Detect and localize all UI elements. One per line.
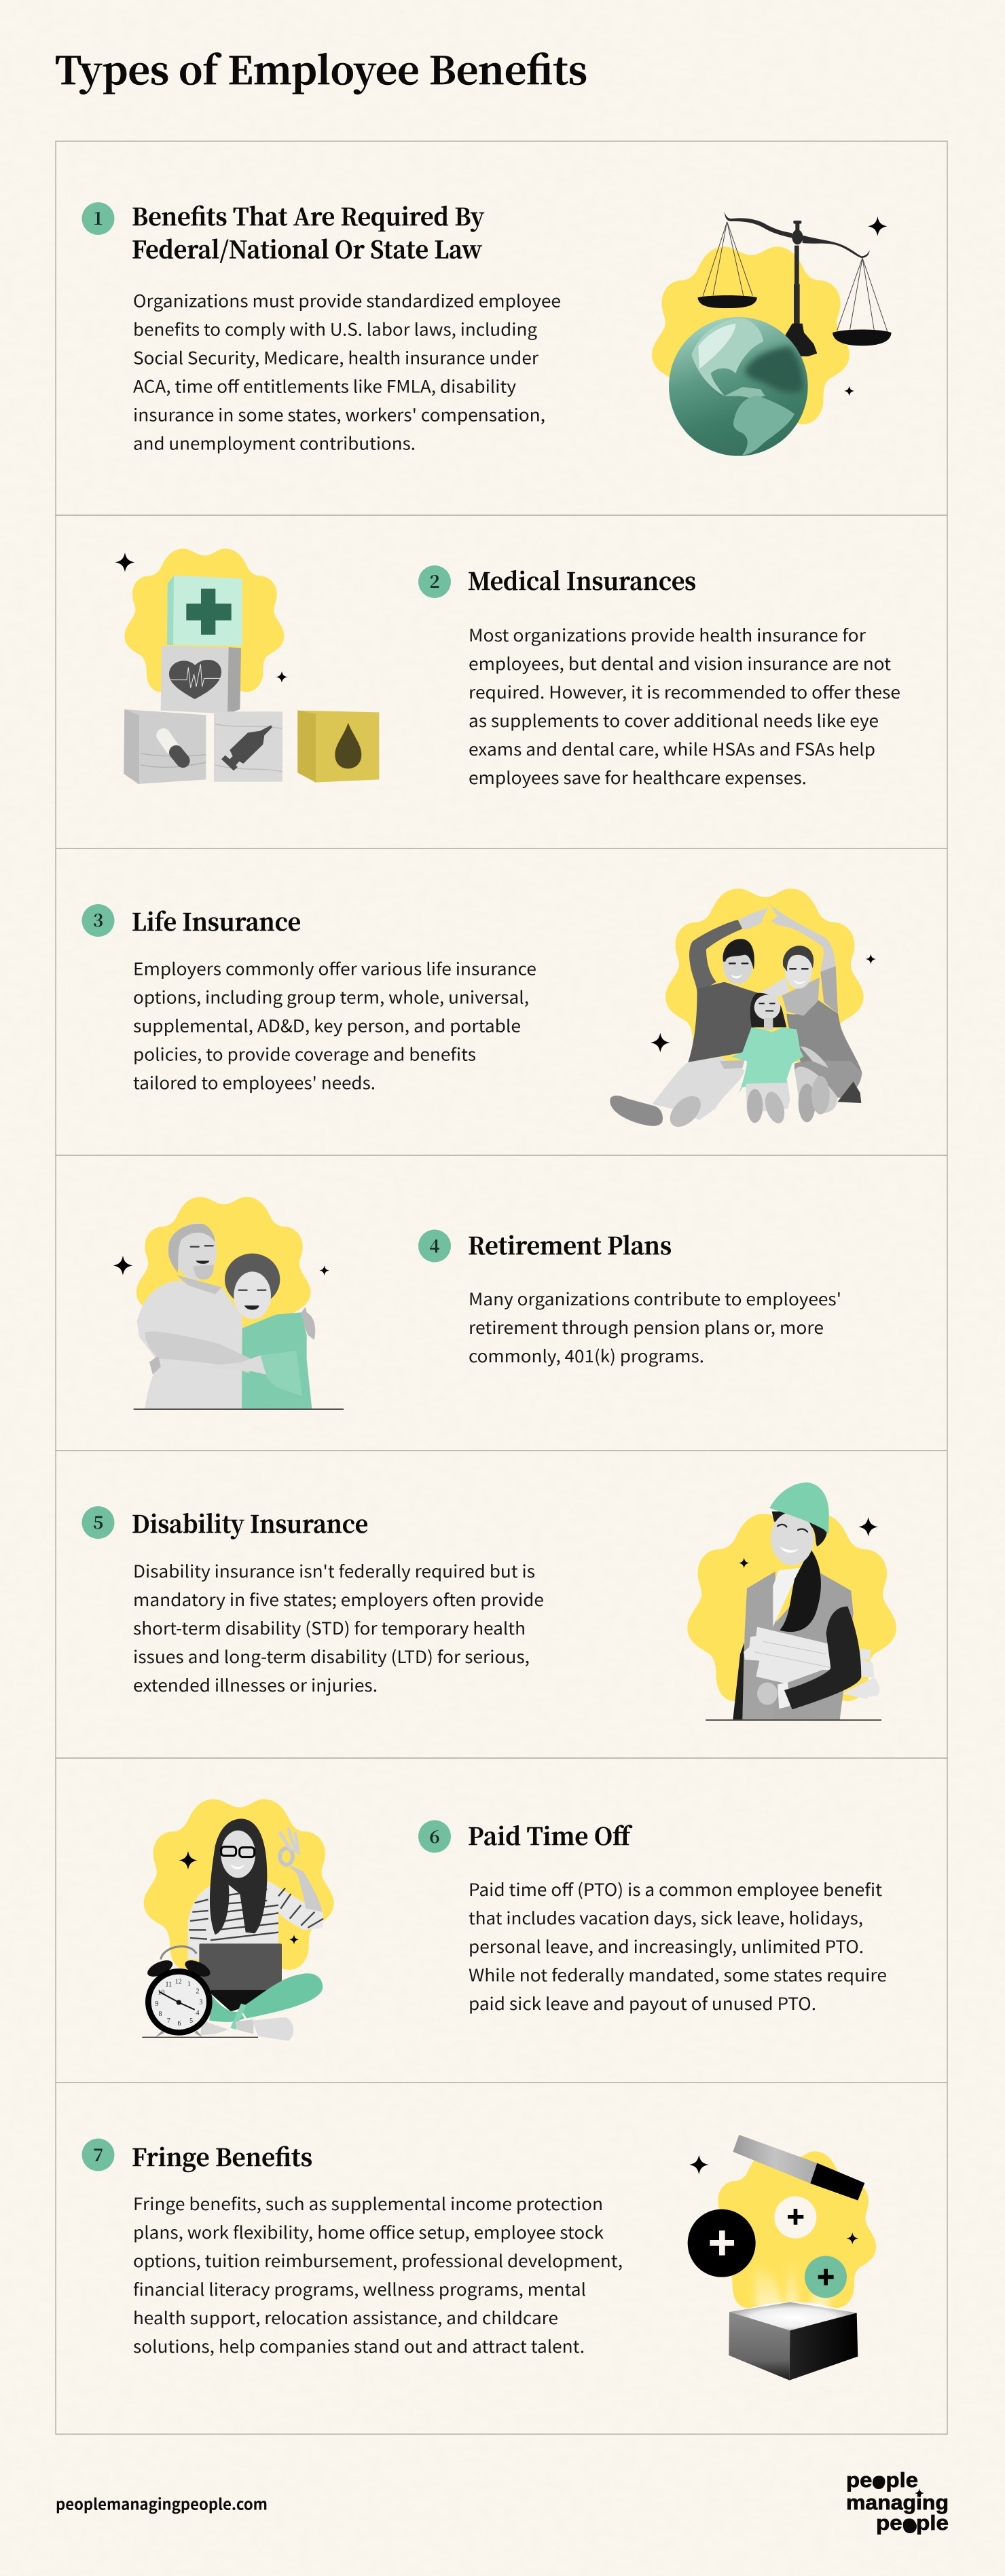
- icon: alarm clock: 7: [167, 2017, 170, 2025]
- icon: alarm clock: 1: [187, 1981, 191, 1988]
- title: Types of Employee Benefits: [55, 41, 587, 96]
- icon: alarm clock: 9: [155, 2000, 158, 2008]
- body text 5: issues and long-term disability (LTD) for serious,: [133, 1644, 530, 1668]
- body text 5: short-term disability (STD) for temporary health: [133, 1616, 526, 1640]
- panel: 2 medical insurances: [56, 515, 947, 848]
- body text 5: mandatory in five states; employers often provide: [133, 1587, 544, 1611]
- body text 3: [133, 956, 536, 1094]
- body text 3: tailored to employees' needs.: [133, 1070, 376, 1094]
- body text 6: Paid time off (PTO) is a common employee benefit: [469, 1877, 883, 1901]
- number badge 5: [81, 1506, 114, 1539]
- body text 1: insurance in some states, workers' compensation,: [133, 402, 545, 426]
- body text 6: paid sick leave and payout of unused PTO.: [469, 1991, 816, 2015]
- body text 5: extended illnesses or injuries.: [133, 1673, 378, 1697]
- icon: alarm clock: [145, 1947, 213, 2038]
- body text 6: While not federally mandated, some states require: [469, 1962, 887, 1987]
- heading 6: Paid Time Off: [468, 1818, 633, 1852]
- icon: green plus circle: [805, 2256, 847, 2298]
- body text 7: financial literacy programs, wellness programs, mental: [133, 2277, 586, 2301]
- number badge 2: [418, 565, 451, 598]
- body text 1: Social Security, Medicare, health insurance under: [133, 345, 538, 369]
- number badge 7: [81, 2138, 114, 2171]
- body text 1: benefits to comply with U.S. labor laws, including: [133, 316, 537, 341]
- number badge 3: 3: [93, 907, 103, 932]
- body text 7: solutions, help companies stand out and attract talent.: [133, 2334, 585, 2358]
- icon: alarm clock: 10: [158, 1989, 164, 1996]
- number badge 1: [81, 202, 114, 235]
- number badge 4: 4: [429, 1233, 440, 1258]
- logo: people: [876, 2511, 949, 2535]
- panel: 3 life insurance: [56, 848, 947, 1155]
- body text 6: personal leave, and increasingly, unlimited PTO.: [469, 1934, 864, 1958]
- panel: 7 fringe benefits: [56, 2083, 947, 2434]
- icon: alarm clock: 5: [189, 2017, 193, 2025]
- number badge 3: [81, 904, 114, 937]
- panel: 4 retirement plans: [56, 1155, 947, 1451]
- body text 2: employees save for healthcare expenses.: [469, 765, 807, 789]
- illustration: scales and globe: [652, 212, 892, 456]
- body text 4: Many organizations contribute to employees': [469, 1286, 841, 1311]
- icon: alarm clock: 12: [175, 1979, 182, 1986]
- body text 2: as supplements to cover additional needs like eye: [469, 708, 879, 732]
- panel: 1 benefits required by law: [56, 141, 947, 515]
- body text 3: options, including group term, whole, universal,: [133, 984, 529, 1009]
- body text 4: retirement through pension plans or, more: [469, 1315, 824, 1339]
- illustration: senior couple: [113, 1197, 344, 1409]
- heading 7: Fringe Benefits: [132, 2140, 312, 2173]
- number badge 6: 6: [429, 1823, 440, 1848]
- number badge 6: [418, 1821, 451, 1853]
- icon: alarm clock: 6: [177, 2020, 181, 2028]
- body text 3: Employers commonly offer various life insurance: [133, 956, 536, 980]
- heading 3: Life Insurance: [132, 904, 301, 938]
- illustration: engineer with blueprints: [687, 1482, 896, 1720]
- number badge 5: 5: [93, 1509, 103, 1534]
- heading 1: Federal/National Or State Law: [132, 232, 482, 266]
- heading 4: Retirement Plans: [468, 1228, 672, 1262]
- icon: alarm clock: 4: [196, 2009, 199, 2017]
- body text 2: employees, but dental and vision insurance are not: [469, 651, 892, 675]
- body text 6: that includes vacation days, sick leave, holidays,: [469, 1905, 863, 1930]
- body text 7: [133, 2191, 623, 2358]
- icon: alarm clock: 2: [196, 1988, 199, 1996]
- body text 7: Fringe benefits, such as supplemental income protection: [133, 2191, 603, 2216]
- logo: [846, 2468, 949, 2535]
- heading 5: Disability Insurance: [132, 1506, 368, 1540]
- body text 2: Most organizations provide health insurance for: [469, 622, 866, 647]
- panel: 5 disability insurance: [56, 1451, 947, 1758]
- body text 7: health support, relocation assistance, and childcare: [133, 2305, 558, 2330]
- body text 2: required. However, it is recommended to offer these: [469, 679, 900, 704]
- body text 3: supplemental, AD&D, key person, and portable: [133, 1013, 521, 1037]
- number badge 1: 1: [93, 205, 103, 230]
- icon: alarm clock: 3: [199, 1999, 202, 2006]
- number badge 4: [418, 1230, 451, 1263]
- illustration: open gift box: [688, 2135, 876, 2381]
- body text 5: [133, 1558, 544, 1697]
- body text 5: Disability insurance isn't federally required but is: [133, 1558, 535, 1583]
- footer url: peoplemanagingpeople.com: [56, 2491, 268, 2514]
- logo: people: [846, 2468, 918, 2492]
- illustration: medical blocks: [115, 548, 379, 784]
- number badge 2: 2: [429, 568, 440, 593]
- icon: cream plus circle: [774, 2197, 816, 2239]
- body text 1: ACA, time off entitlements like FMLA, disability: [133, 373, 516, 398]
- body text 1: Organizations must provide standardized employee: [133, 288, 561, 312]
- body text 7: options, tuition reimbursement, professional development,: [133, 2248, 623, 2273]
- body text 2: exams and dental care, while HSAs and FSAs help: [469, 736, 875, 761]
- body text 4: commonly, 401(k) programs.: [469, 1343, 704, 1368]
- number badge 7: 7: [93, 2142, 103, 2167]
- heading 1: [132, 199, 485, 266]
- logo: managing: [846, 2490, 949, 2514]
- icon: black plus circle: [688, 2209, 756, 2277]
- body text 7: plans, work flexibility, home office setup, employee stock: [133, 2220, 604, 2244]
- panel: 6 paid time off: [56, 1758, 947, 2083]
- illustration: family: [610, 889, 876, 1132]
- body text 1: and unemployment contributions.: [133, 430, 416, 455]
- heading 2: Medical Insurances: [468, 563, 696, 597]
- icon: alarm clock: 8: [158, 2011, 162, 2018]
- illustration: woman with laptop and alarm clock: [142, 1799, 334, 2041]
- body text 2: [469, 622, 900, 789]
- body text 3: policies, to provide coverage and benefits: [133, 1041, 476, 1066]
- body text 1: [133, 288, 561, 455]
- heading 1: Benefits That Are Required By: [132, 199, 485, 233]
- body text 6: [469, 1877, 887, 2015]
- icon: alarm clock: 11: [166, 1981, 172, 1989]
- body text 4: [469, 1286, 841, 1368]
